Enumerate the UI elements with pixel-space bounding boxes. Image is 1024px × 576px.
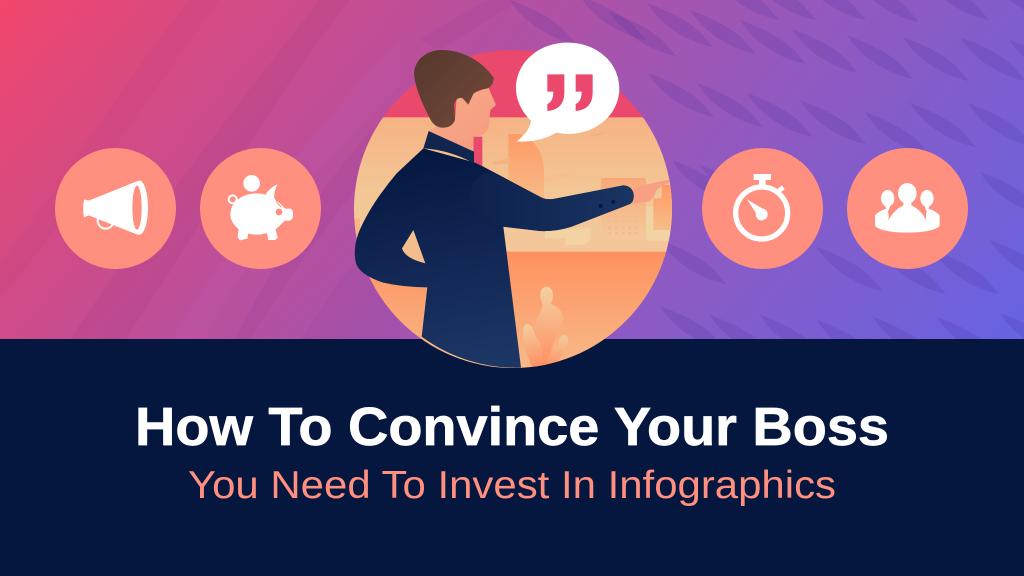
jacket bbox=[355, 148, 634, 368]
hand bbox=[632, 179, 670, 204]
illustration: presenter in circular scene bbox=[354, 42, 672, 368]
icon: stopwatch bbox=[702, 148, 823, 269]
arm hole bbox=[402, 230, 425, 263]
title: How To Convince Your Boss bbox=[135, 397, 889, 457]
scene circle bbox=[354, 50, 672, 368]
collar bbox=[423, 131, 474, 163]
sleeve buttons bbox=[599, 200, 615, 208]
plant bbox=[523, 287, 568, 367]
subtitle: You Need To Invest In Infographics bbox=[188, 464, 836, 507]
face and neck bbox=[428, 87, 496, 152]
speech bubble bbox=[516, 43, 619, 142]
diagonal bands left bbox=[0, 0, 520, 340]
gradient background bbox=[0, 0, 1024, 340]
hair bbox=[414, 50, 494, 128]
buildings bbox=[473, 132, 673, 245]
sleeve highlight bbox=[470, 173, 634, 231]
feather streaks right bbox=[510, 0, 1024, 364]
quotation marks bbox=[547, 74, 593, 111]
icon: megaphone bbox=[55, 148, 176, 269]
icon: piggy bank bbox=[200, 148, 321, 269]
icon: team of people bbox=[847, 148, 968, 269]
navy title band bbox=[0, 339, 1024, 576]
